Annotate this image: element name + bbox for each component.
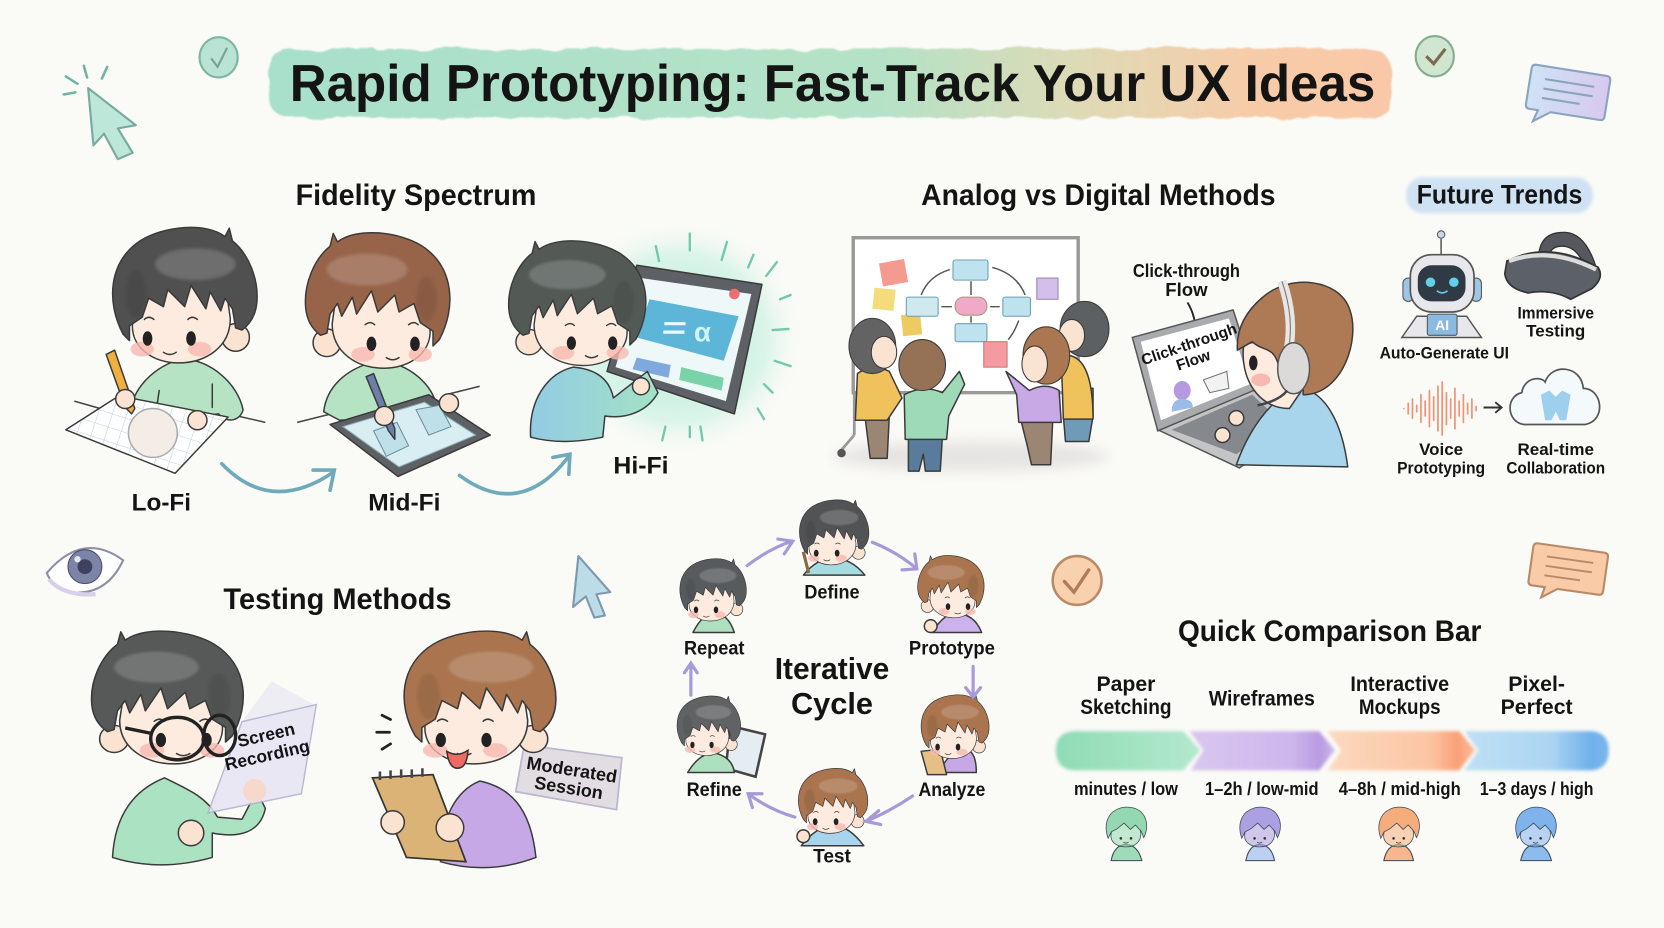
label: Immersive Testing <box>1518 303 1594 340</box>
step: Test <box>797 768 868 868</box>
laptop <box>1132 310 1300 468</box>
card: Screen Recording <box>208 681 316 813</box>
laptop: Click-through <box>1139 321 1239 369</box>
time and fidelity labels: 4–8h / mid-high <box>1339 779 1461 799</box>
card: Moderated Session: Moderated <box>525 753 618 787</box>
label: Hi-Fi: Hi-Fi <box>613 452 669 479</box>
label: Immersive Testing: Testing <box>1526 321 1585 340</box>
icon: AI robot: AI <box>1435 318 1449 333</box>
icon: orange speech bubble <box>1526 543 1608 606</box>
heading: Quick Comparison Bar: Quick Comparison Bar <box>1178 615 1482 648</box>
panel: digital laptop kid <box>1132 281 1353 468</box>
arrow: Lo-Fi to Mid-Fi <box>222 464 334 492</box>
icon: peach check badge <box>1053 556 1102 605</box>
heading: Iterative Cycle <box>775 651 889 721</box>
label: Voice Prototyping <box>1397 440 1485 477</box>
mini kid: orange <box>1379 807 1419 861</box>
headphones <box>1258 281 1310 405</box>
mini kid: purple <box>1240 807 1280 861</box>
icon: green check badge <box>200 37 238 77</box>
panel: analog whiteboard team <box>833 238 1109 471</box>
glasses <box>125 715 236 760</box>
title banner <box>269 49 1391 118</box>
label: Auto-Generate UI: Auto-Generate UI <box>1380 344 1509 363</box>
step: Refine <box>677 696 765 801</box>
heading: Analog vs Digital Methods: Analog vs Digital Methods <box>921 179 1276 212</box>
icon: eye <box>47 548 123 594</box>
step: Refine: Refine <box>687 780 742 801</box>
mini kid: green <box>1106 807 1147 861</box>
label: Immersive Testing: Immersive <box>1518 303 1594 322</box>
icon: cursor with sparks <box>64 66 136 159</box>
label: Click-through Flow: Click-through <box>1133 260 1240 281</box>
step: Repeat: Repeat <box>684 639 745 660</box>
label: Click-through Flow: Flow <box>1165 279 1208 300</box>
step: Define: Define <box>804 583 860 604</box>
kid: purple shirt <box>1006 327 1070 465</box>
column labels <box>1080 673 1573 719</box>
card: Screen Recording: Screen <box>235 719 297 751</box>
column labels: Perfect <box>1501 696 1573 719</box>
heading: Iterative Cycle: Cycle <box>791 686 873 721</box>
label: Real-time Collaboration <box>1506 440 1605 477</box>
label: Real-time Collaboration: Collaboration <box>1506 458 1605 477</box>
arrow: voice to cloud <box>1484 402 1502 413</box>
icon: blue cursor <box>573 556 610 618</box>
icon: blue speech bubble <box>1523 64 1611 132</box>
icon: collaboration cloud <box>1510 369 1600 424</box>
cycle arrows <box>684 539 981 825</box>
panel: Mid-Fi kid <box>297 233 490 476</box>
label: Mid-Fi: Mid-Fi <box>368 489 440 516</box>
column labels: Wireframes <box>1209 688 1315 711</box>
panel: Future Trends <box>1380 177 1605 477</box>
icon: AI robot <box>1402 231 1481 337</box>
time and fidelity labels <box>1074 779 1593 799</box>
icon: voice waveform <box>1404 382 1476 435</box>
title: Rapid Prototyping: Fast-Track Your UX Ideas <box>290 55 1375 113</box>
time and fidelity labels: 1–3 days / high <box>1480 779 1593 799</box>
label: Real-time Collaboration: Real-time <box>1518 440 1594 459</box>
panel: Iterative Cycle <box>677 500 995 868</box>
step: Repeat <box>680 559 746 660</box>
gradient chevron bar <box>1056 731 1609 770</box>
label: Click-through Flow <box>1133 260 1240 336</box>
heading: Fidelity Spectrum: Fidelity Spectrum <box>296 179 536 212</box>
notepad <box>373 768 466 862</box>
time and fidelity labels: minutes / low <box>1074 779 1179 799</box>
time and fidelity labels: 1–2h / low-mid <box>1205 779 1319 799</box>
whiteboard <box>837 238 1078 457</box>
kid: green shirt back view <box>899 340 965 471</box>
card: Moderated Session: Session <box>533 773 604 803</box>
column labels: Paper <box>1096 673 1155 696</box>
panel: Hi-Fi kid with glowing tablet: α <box>694 317 711 348</box>
step: Analyze <box>918 695 989 801</box>
laptop: Flow <box>1174 347 1213 375</box>
heading: Testing Methods: Testing Methods <box>223 583 452 616</box>
column labels: Mockups <box>1359 696 1441 719</box>
panel: Hi-Fi kid with glowing tablet <box>509 219 804 456</box>
heading: Future Trends pill: Future Trends <box>1417 180 1582 210</box>
column labels: Sketching <box>1080 696 1172 719</box>
label: Voice Prototyping: Prototyping <box>1397 458 1485 477</box>
column labels: Pixel- <box>1508 673 1565 696</box>
heading: Iterative Cycle: Iterative <box>775 651 889 686</box>
card: Screen Recording: Recording <box>223 736 312 774</box>
step: Prototype: Prototype <box>909 639 995 660</box>
mini kid: blue <box>1516 807 1556 861</box>
step: Prototype <box>909 555 995 660</box>
icon: VR headset <box>1505 232 1600 299</box>
panel: Moderated Session kid <box>373 631 622 868</box>
icon: sage check badge <box>1416 36 1454 76</box>
arrow: Mid-Fi to Hi-Fi <box>460 454 570 494</box>
arrow: label to laptop <box>1187 302 1201 336</box>
label: Lo-Fi: Lo-Fi <box>132 489 191 516</box>
card: Moderated Session <box>516 745 622 810</box>
column labels: Interactive <box>1350 673 1449 696</box>
panel: Quick Comparison Bar <box>1056 673 1609 861</box>
step: Analyze: Analyze <box>918 780 985 801</box>
step: Define <box>799 500 869 604</box>
panel: Screen Recording kid <box>92 631 316 865</box>
kid: yellow shirt right <box>1059 301 1109 441</box>
kid: yellow shirt left <box>849 318 902 458</box>
step: Test: Test <box>813 847 852 868</box>
panel: Lo-Fi kid <box>66 227 265 473</box>
label: Voice Prototyping: Voice <box>1419 440 1463 459</box>
